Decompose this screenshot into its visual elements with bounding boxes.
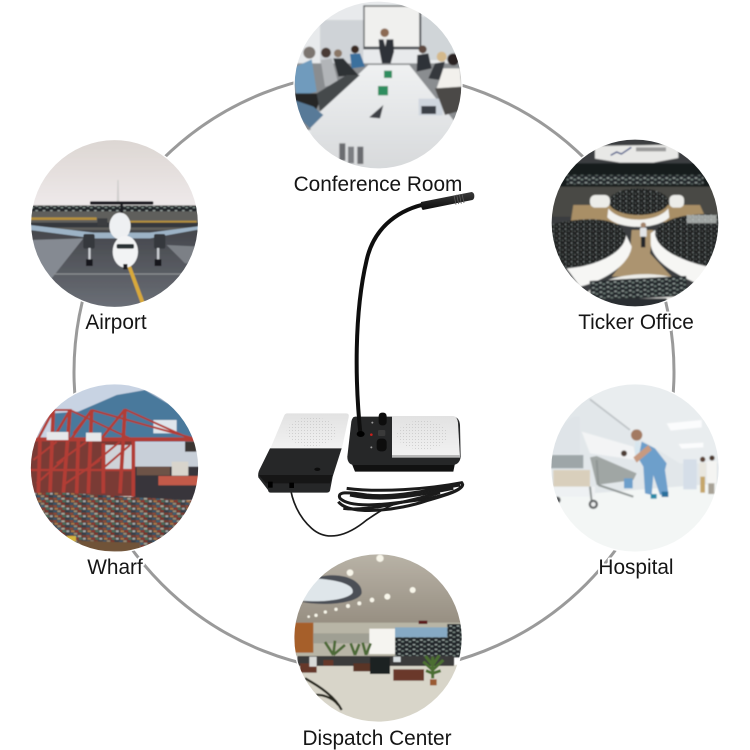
wall xyxy=(290,623,467,656)
power LED xyxy=(370,433,373,436)
horizon xyxy=(30,205,200,230)
ceiling lights xyxy=(307,555,416,618)
person in aisle xyxy=(640,222,647,247)
knobs xyxy=(379,413,387,425)
doctors in background xyxy=(683,455,717,494)
label: ticker office: Ticker Office xyxy=(578,311,694,334)
photo: airport xyxy=(30,138,200,310)
right desk xyxy=(651,230,708,283)
cranes xyxy=(30,409,197,497)
photo: wharf xyxy=(29,383,200,553)
nurse in scrubs xyxy=(631,429,668,499)
video wall xyxy=(369,629,395,654)
cable coil xyxy=(338,483,463,511)
people on the right xyxy=(417,45,463,115)
floor xyxy=(299,664,457,722)
front monitors xyxy=(587,273,676,300)
product: intercom with gooseneck microphone and speaker pod xyxy=(258,192,474,536)
ceiling cove xyxy=(300,575,362,604)
microphone head xyxy=(421,192,474,210)
label: airport: Airport xyxy=(85,311,147,334)
ship xyxy=(133,467,200,500)
photo: ticker office xyxy=(550,138,720,310)
label: dispatch center: Dispatch Center xyxy=(302,727,452,750)
apron xyxy=(30,230,200,310)
container yard xyxy=(30,492,200,550)
floor xyxy=(290,63,467,130)
label: hospital: Hospital xyxy=(598,556,674,579)
wooden floor xyxy=(570,205,707,227)
upper wall and sign xyxy=(560,163,710,187)
speaker pod xyxy=(258,413,349,493)
central desk xyxy=(607,208,669,227)
aircraft xyxy=(30,180,200,269)
workstations xyxy=(297,656,454,666)
left desk xyxy=(567,235,632,287)
water bottles xyxy=(384,71,392,78)
bed area xyxy=(555,432,567,442)
label: conference room: Conference Room xyxy=(294,173,462,196)
cable xyxy=(290,485,397,536)
presenter xyxy=(379,28,394,63)
ceiling light panels xyxy=(667,420,702,431)
connecting ring xyxy=(74,72,674,672)
mountain xyxy=(53,390,200,442)
console base xyxy=(347,413,461,472)
photo: conference room xyxy=(290,0,467,173)
table xyxy=(310,64,454,168)
people on the left xyxy=(293,45,365,128)
photo: dispatch center xyxy=(290,553,467,723)
label: wharf: Wharf xyxy=(87,556,143,579)
plants xyxy=(325,641,443,685)
photo: hospital xyxy=(550,383,720,553)
gooseneck xyxy=(357,205,423,436)
